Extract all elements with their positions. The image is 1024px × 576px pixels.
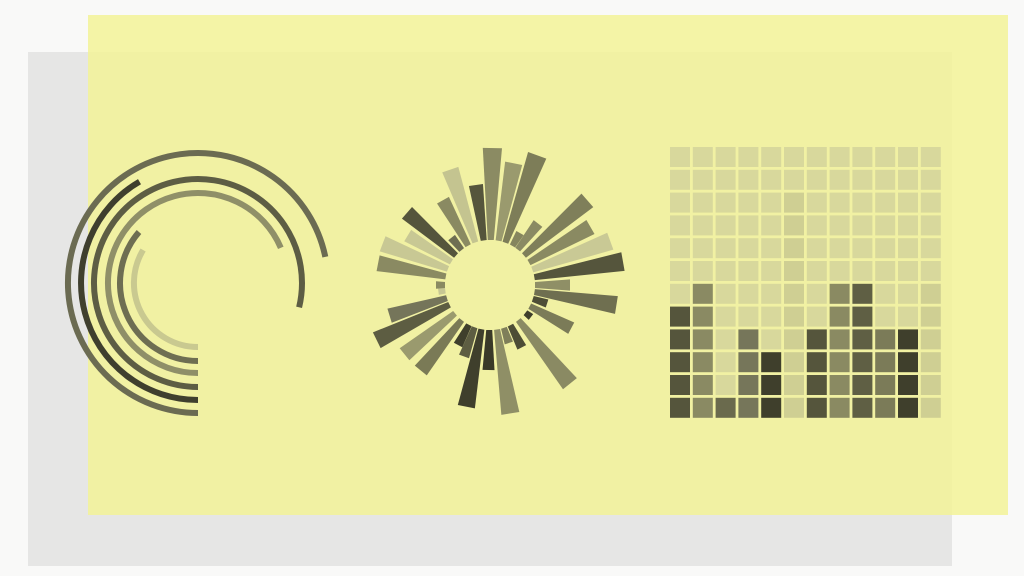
- col 10: [898, 329, 918, 418]
- col 4: [761, 352, 781, 418]
- col 0: [670, 307, 690, 418]
- col 1: [693, 284, 713, 418]
- col 7: [830, 284, 850, 418]
- grid background cells: [670, 147, 941, 395]
- chart: waffle grid bar chart: [670, 147, 941, 418]
- col 8: [852, 284, 872, 418]
- chart: concentric arcs: [68, 153, 325, 413]
- slightly darker background columns: [784, 193, 941, 418]
- col 2: [716, 398, 736, 418]
- panel: yellow card: [88, 15, 1008, 515]
- col 3: [738, 329, 758, 418]
- col 6: [807, 329, 827, 418]
- chart: radial sunburst bars: [373, 148, 625, 415]
- col 9: [875, 329, 895, 418]
